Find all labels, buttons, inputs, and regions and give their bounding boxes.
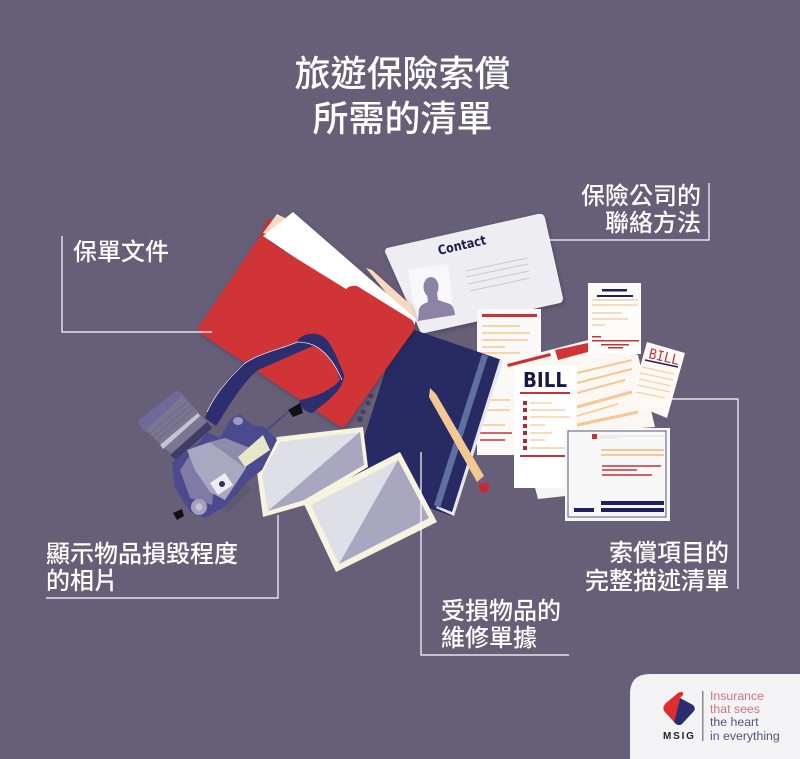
lens [138,390,212,460]
pencil [429,388,490,492]
bill documents [477,283,685,521]
MSIG logo panel: Insurance [710,689,764,703]
MSIG logo panel: in everything [710,729,780,743]
small bill [630,342,685,418]
receipt with orange lines [477,309,541,455]
contact card: Contact [437,233,488,259]
MSIG logo panel [630,674,800,759]
title [294,53,511,139]
label: 受損物品的維修單據 [421,452,569,655]
folder [198,212,416,427]
label: 保險公司的聯絡方法: 保險公司的 [581,183,701,210]
label: 索償項目的完整描述清單: 索償項目的 [609,540,729,567]
photo front [303,452,437,572]
label: 保險公司的聯絡方法 [548,183,709,240]
small bill: BILL [647,346,681,369]
label: 索償項目的完整描述清單: 完整描述清單 [585,568,729,595]
MSIG logo panel: that sees [710,702,760,716]
strap [205,334,344,430]
main bill: BILL [523,368,567,392]
label: 保單文件 [62,236,212,332]
title: 所需的清單 [312,98,493,139]
label: 索償項目的完整描述清單 [585,399,738,595]
label: 保單文件: 保單文件 [73,239,169,266]
slanted large sheet [503,337,655,440]
photos [257,427,437,572]
title: 旅遊保險索償 [294,53,511,94]
label: 保險公司的聯絡方法: 聯絡方法 [605,210,701,237]
MSIG logo panel: MSIG [663,731,696,742]
label: 顯示物品損毀程度的相片 [46,515,278,598]
top letter [588,283,641,354]
main bill [514,366,576,499]
notebook [350,325,503,516]
camera [138,334,344,520]
contact card [385,214,563,333]
body [172,414,277,520]
photo back [257,427,368,517]
label: 顯示物品損毀程度的相片: 顯示物品損毀程度 [46,541,238,568]
MSIG logo panel: the heart [710,715,759,729]
icon: MSIG mark [663,692,695,725]
label: 受損物品的維修單據: 維修單據 [441,625,537,652]
label: 受損物品的維修單據: 受損物品的 [441,598,561,625]
form [565,428,670,521]
label: 顯示物品損毀程度的相片: 的相片 [46,568,118,595]
